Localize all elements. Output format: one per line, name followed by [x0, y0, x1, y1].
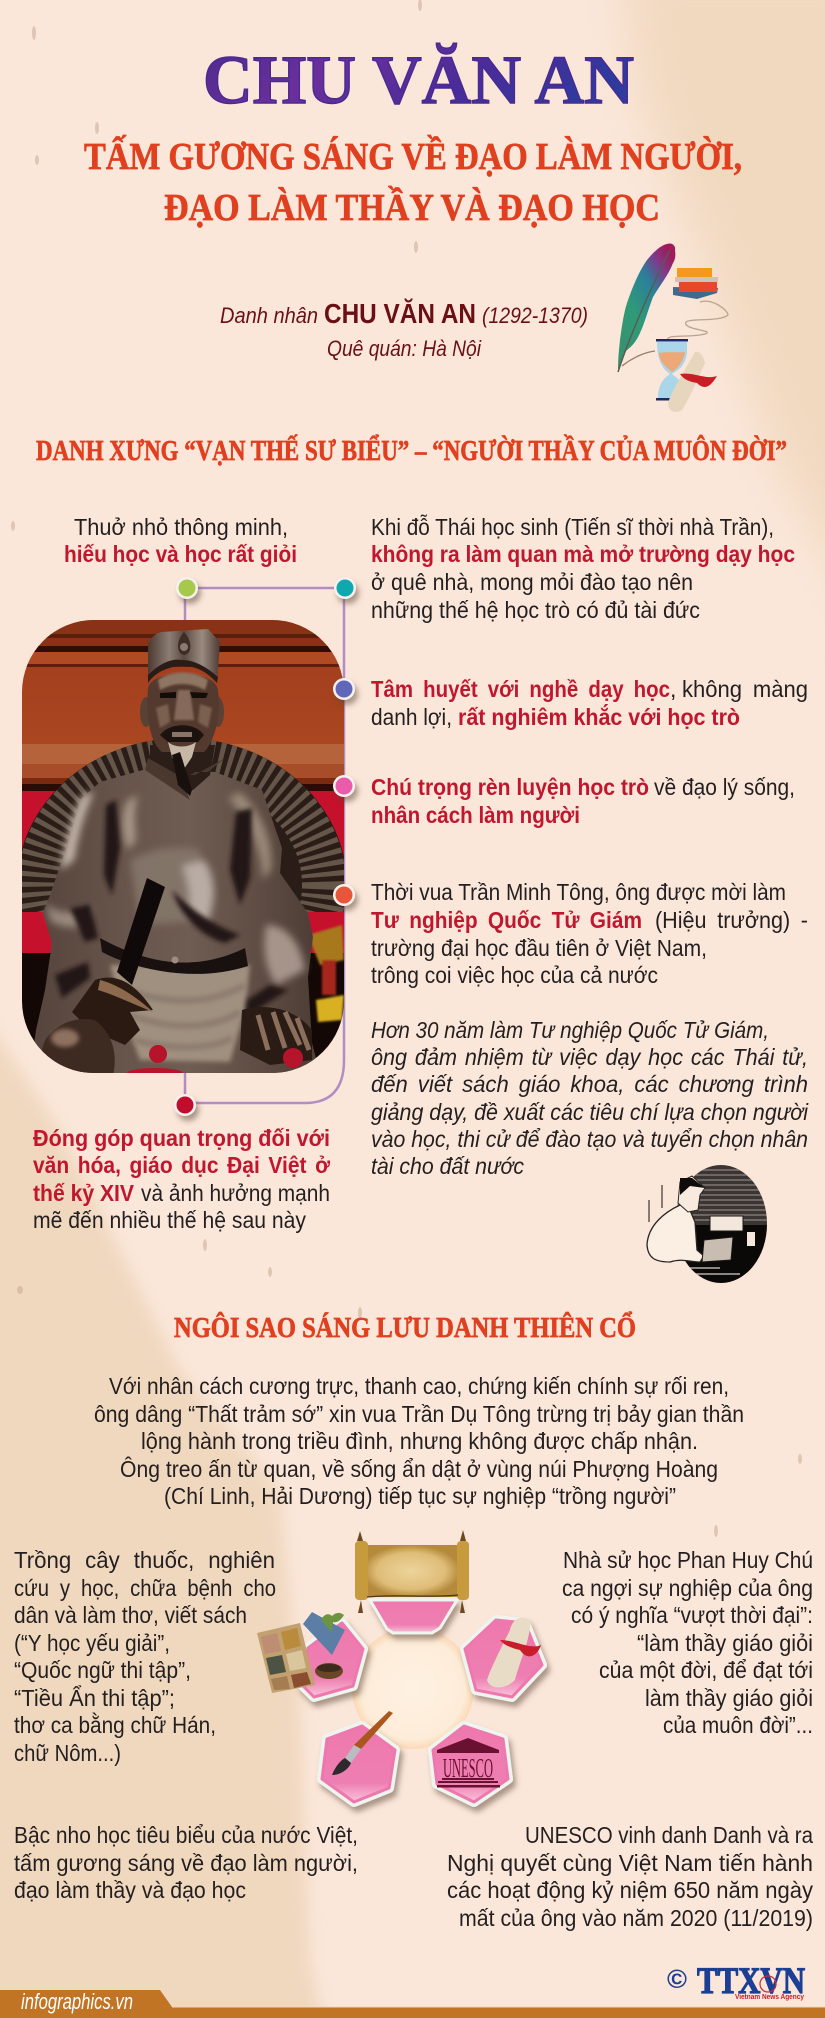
- icon: medicine box with book and bowl: [257, 1612, 345, 1693]
- text: resignation paragraph: Ông treo ấn từ quan, về sống ẩn dật ở vùng núi Phượng Hoàng: [120, 1455, 718, 1482]
- text: medicine and poetry: “Quốc ngữ thi tập”,: [14, 1657, 191, 1683]
- person name and hometown: (1292-1370): [482, 303, 588, 328]
- text: childhood: [64, 514, 297, 567]
- baton: [117, 878, 165, 985]
- text: Phan Huy Chu praise: của một đời, để đạt tới: [599, 1657, 813, 1683]
- TTXVN logo: Vietnam News Agency: [735, 1992, 805, 2001]
- text: opened a school: Khi đỗ Thái học sinh (Tiến sĩ thời nhà Trần),: [371, 514, 774, 540]
- neck and collar: [150, 745, 215, 790]
- text: 30 years italic: ông đảm nhiệm từ việc dạy học các Thái tử,: [371, 1044, 808, 1070]
- TTXVN logo: ©: [667, 1964, 687, 1994]
- text: resignation paragraph: lộng hành trong triều đình, nhưng không được chấp nhận.: [141, 1428, 698, 1454]
- left hand: [72, 978, 153, 1045]
- icon: paint brush: [332, 1711, 393, 1775]
- pleated fan collar: [22, 740, 344, 912]
- apron: [110, 965, 250, 1062]
- text: medicine and poetry: “Tiều Ẩn thi tập”;: [14, 1684, 175, 1711]
- hat: [148, 629, 220, 683]
- wood wall: [22, 620, 350, 1078]
- hexagon cluster: [257, 1530, 542, 1802]
- text: Quoc Tu Giam: Thời vua Trần Minh Tông, ông được mời làm: [371, 879, 786, 905]
- dot pink: [333, 775, 355, 797]
- bottom-right hexagon: [433, 1726, 508, 1802]
- text: resignation paragraph: [94, 1373, 744, 1509]
- text: Phan Huy Chu praise: làm thầy giáo giỏi: [645, 1685, 813, 1711]
- text: Quoc Tu Giam: trường đại học đầu tiên ở Việt Nam,: [371, 935, 707, 961]
- text: moral training: [371, 774, 795, 828]
- text: contribution: mẽ đến nhiều thế hệ sau này: [33, 1207, 306, 1233]
- person name and hometown: Quê quán: Hà Nội: [327, 336, 482, 361]
- bottom-left hexagon: [322, 1726, 395, 1802]
- dot orange: [333, 884, 355, 906]
- dot green: [176, 577, 198, 599]
- text: devotion to teaching: [371, 676, 808, 730]
- top hexagon: [370, 1600, 457, 1633]
- left knee: [42, 1019, 115, 1073]
- subtitle: [84, 135, 742, 229]
- text: childhood: Thuở nhỏ thông minh,: [74, 514, 288, 540]
- robe highlights: [46, 792, 305, 985]
- dot blue: [333, 678, 355, 700]
- text: contribution: văn hóa, giáo dục Đại Việt ở: [33, 1152, 331, 1178]
- text: Confucian scholar: Bậc nho học tiêu biểu của nước Việt,: [14, 1822, 358, 1848]
- text: Quoc Tu Giam: (Hiệu trưởng) -: [655, 907, 808, 933]
- text: opened a school: không ra làm quan mà mở trường dạy học: [371, 541, 795, 567]
- head: [140, 672, 224, 796]
- person name and hometown: CHU VĂN AN: [324, 298, 476, 329]
- text: devotion to teaching: Tâm huyết với nghề dạy học: [371, 676, 670, 702]
- right hand: [240, 1007, 312, 1065]
- text: Confucian scholar: [14, 1822, 358, 1903]
- centre circle: [352, 1627, 474, 1749]
- text: Quoc Tu Giam: Tư nghiệp Quốc Tử Giám: [371, 907, 642, 933]
- text: medicine and poetry: (“Y học yếu giải”,: [14, 1630, 170, 1656]
- text: Quoc Tu Giam: trông coi việc học của cả nước: [371, 962, 658, 988]
- icon: diploma scroll: [487, 1618, 541, 1688]
- text: opened a school: những thế hệ học trò có đủ tài đức: [371, 597, 700, 623]
- text: resignation paragraph: (Chí Linh, Hải Dương) tiếp tục sự nghiệp “trồng người”: [164, 1483, 676, 1509]
- text: medicine and poetry: dân và làm thơ, viết sách: [14, 1602, 247, 1628]
- section heading: ngoi sao sang: NGÔI SAO SÁNG LƯU DANH THIÊN CỔ: [174, 1310, 636, 1344]
- text: 30 years italic: tài cho đất nước: [371, 1153, 524, 1179]
- text: 30 years italic: Hơn 30 năm làm Tư nghiệp Quốc Tử Giám,: [371, 1017, 769, 1043]
- text: devotion to teaching: danh lợi,: [371, 704, 452, 730]
- text: devotion to teaching: ,: [670, 676, 676, 702]
- timeline dots: [174, 577, 356, 1116]
- icon: UNESCO temple: UNESCO: [443, 1753, 493, 1783]
- ornaments at right: [308, 925, 344, 1022]
- footer band with site name: [0, 1989, 825, 2018]
- timeline connector: [185, 588, 344, 1103]
- text: contribution: thế kỷ XIV: [33, 1180, 135, 1206]
- red balls: [127, 1045, 303, 1073]
- text: moral training: nhân cách làm người: [371, 802, 580, 828]
- text: Quoc Tu Giam: [371, 879, 808, 988]
- left hexagon: [302, 1623, 363, 1697]
- icon: quill, books, hourglass and scroll: [618, 243, 728, 412]
- text: moral training: về đạo lý sống,: [654, 774, 795, 800]
- text: 30 years italic: [371, 1017, 809, 1179]
- belt: [100, 938, 248, 974]
- text: Phan Huy Chu praise: “làm thầy giáo giỏi: [637, 1630, 813, 1656]
- text: opened a school: [371, 514, 795, 623]
- subtitle: ĐẠO LÀM THẦY VÀ ĐẠO HỌC: [164, 186, 660, 229]
- text: medicine and poetry: Trồng cây thuốc, nghiên: [14, 1547, 275, 1573]
- text: moral training: Chú trọng rèn luyện học trò: [371, 774, 649, 800]
- TTXVN logo: [667, 1961, 805, 2002]
- text: Confucian scholar: đạo làm thầy và đạo học: [14, 1877, 246, 1903]
- text: medicine and poetry: chữ Nôm...): [14, 1740, 121, 1766]
- text: devotion to teaching: rất nghiêm khắc với học trò: [458, 703, 740, 730]
- footer band with site name: infographics.vn: [21, 1989, 133, 2014]
- text: medicine and poetry: [14, 1547, 276, 1766]
- text: contribution: và ảnh hưởng mạnh: [141, 1180, 330, 1206]
- text: 30 years italic: đến viết sách giáo khoa, các chương trình: [371, 1071, 808, 1097]
- robe dark folds: [55, 800, 288, 1025]
- subtitle: TẤM GƯƠNG SÁNG VỀ ĐẠO LÀM NGƯỜI,: [84, 135, 742, 178]
- icon: UNESCO temple: [437, 1738, 500, 1788]
- icon: parchment scroll: [355, 1530, 469, 1613]
- text: childhood: hiếu học và học rất giỏi: [64, 541, 297, 567]
- text: resignation paragraph: Với nhân cách cương trực, thanh cao, chứng kiến chính sự rối ren,: [109, 1373, 729, 1399]
- text: UNESCO honour: Nghị quyết cùng Việt Nam tiến hành: [447, 1850, 813, 1876]
- text: Confucian scholar: tấm gương sáng về đạo làm người,: [14, 1850, 358, 1876]
- text: medicine and poetry: cứu y học, chữa bệnh cho: [14, 1575, 276, 1601]
- person name and hometown: Danh nhân: [220, 303, 318, 328]
- text: contribution: Đóng góp quan trọng đối với: [33, 1125, 330, 1151]
- portrait photo of the statue: [17, 620, 350, 1078]
- text: UNESCO honour: [447, 1822, 813, 1931]
- dot teal: [334, 577, 356, 599]
- text: contribution: [33, 1125, 331, 1233]
- text: resignation paragraph: ông dâng “Thất trảm sớ” xin vua Trần Dụ Tông trừng trị bảy gian thần: [94, 1401, 744, 1427]
- text: Phan Huy Chu praise: [562, 1547, 813, 1738]
- right hexagon: [465, 1620, 542, 1697]
- text: opened a school: ở quê nhà, mong mỏi đào tạo nên: [371, 569, 693, 595]
- text: UNESCO honour: các hoạt động kỷ niệm 650 năm ngày: [447, 1877, 813, 1903]
- text: medicine and poetry: thơ ca bằng chữ Hán,: [14, 1712, 216, 1738]
- dot red: [174, 1094, 196, 1116]
- robe: [30, 768, 320, 1073]
- title: CHU VĂN AN: [203, 42, 634, 118]
- TTXVN logo: TTXVN: [697, 1961, 805, 2002]
- person name and hometown: [220, 298, 588, 361]
- icon: scholar reading drawing: [647, 1160, 770, 1287]
- text: devotion to teaching: không màng: [682, 676, 808, 702]
